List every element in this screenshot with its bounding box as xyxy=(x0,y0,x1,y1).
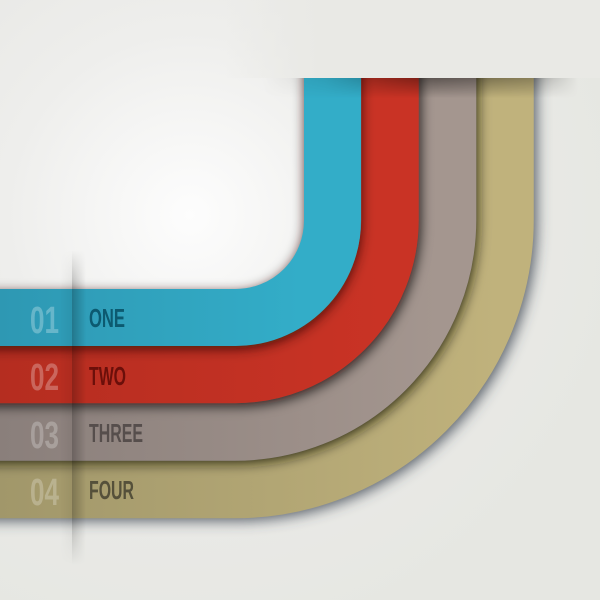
band two: red ribbon xyxy=(0,40,392,378)
label ONE: ONE xyxy=(89,303,125,333)
band three: grey ribbon xyxy=(0,40,450,435)
number 01: 01 xyxy=(30,300,59,342)
number 03: 03 xyxy=(30,415,59,457)
band four: tan ribbon xyxy=(0,40,508,492)
band one: teal ribbon xyxy=(0,40,333,320)
top edge panel xyxy=(225,0,600,78)
vertical fold xyxy=(68,256,84,558)
number 04: 04 xyxy=(30,472,59,514)
shadow under top edge xyxy=(288,78,572,96)
label FOUR: FOUR xyxy=(89,475,134,505)
label THREE: THREE xyxy=(89,418,143,448)
number 02: 02 xyxy=(30,357,59,399)
label TWO: TWO xyxy=(89,361,126,391)
